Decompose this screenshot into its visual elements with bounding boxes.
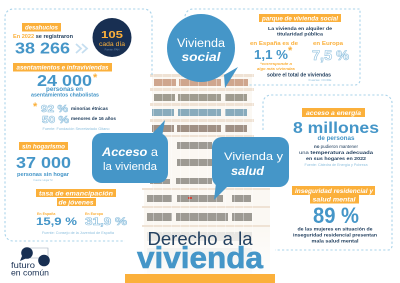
source: Fuente: Hogar SI [34, 178, 53, 182]
text: temperatura adecuada [299, 144, 373, 162]
speech bubble: Vivienda social: Vivienda [177, 38, 226, 50]
title: vivienda [137, 240, 264, 275]
stat: 92 % minorías étnicas [41, 103, 109, 115]
heading: inseguridad residencial y salud mental: inseguridad residencial y [295, 188, 374, 195]
speech bubble: Vivienda social: social [182, 50, 221, 64]
source: Fuente: OCDE [308, 78, 332, 82]
text: temperatura adecuada: en sus hogares en 2022 [306, 156, 366, 162]
number: 8 millones: 8 millones [293, 120, 379, 137]
orange footer bar [125, 274, 275, 283]
heading: tasa de emancipación de jóvenes [36, 189, 116, 207]
stat: España 15,9 %: En España [37, 212, 56, 216]
speech bubble: Acceso a la vivienda: Acceso a [101, 145, 158, 159]
panel: left statistics [5, 9, 152, 241]
source: Fuente: Fundación Secretariado Gitano [42, 127, 110, 131]
speech bubble: Acceso a la vivienda [92, 120, 168, 183]
logo: futuro en común [11, 247, 50, 278]
heading: tasa de emancipación de jóvenes: de jóvenes [58, 200, 94, 207]
chevrons [76, 44, 87, 53]
asterisk: * [93, 72, 98, 84]
title: Derecho a la [148, 229, 254, 249]
stat: 50 % menores de 16 años: 50 % [42, 114, 70, 126]
logo: futuro en común: en común [11, 268, 49, 278]
number: 24 000: 24 000 [37, 73, 92, 90]
badge: 105 cada día: 105 [101, 29, 123, 41]
note [257, 62, 295, 71]
label: en Europa: en Europa [313, 41, 344, 47]
text: temperatura adecuada: no pudieron mantener [314, 144, 358, 150]
text: mujeres [293, 226, 377, 244]
badge: 105 cada día [92, 18, 132, 57]
stat: Europa 31,9 %: En Europa [85, 212, 104, 216]
stat: 92 % minorías étnicas: 92 % [41, 103, 69, 115]
label: en España: en España es de [250, 41, 298, 47]
asterisk: * [288, 45, 293, 57]
heading: desahucios: desahucios [25, 25, 58, 32]
speech bubble: Vivienda y salud: salud [231, 164, 265, 178]
heading: inseguridad residencial y salud mental [292, 186, 375, 204]
number: 7,5 %: 7,5 % [312, 47, 350, 63]
heading: acceso a energía [302, 108, 365, 117]
heading: inseguridad residencial y salud mental: salud mental [312, 197, 356, 204]
heading: acceso a energía: acceso a energía [306, 110, 362, 117]
heading: tasa de emancipación de jóvenes: tasa de emancipación [39, 191, 113, 198]
heading: sin hogarismo: sin hogarismo [22, 143, 65, 150]
stat: España 15,9 %: 15,9 % [36, 216, 77, 228]
logo: futuro en común: futuro [11, 261, 36, 270]
source: Fuente: Cátedra de Energía y Pobreza [304, 163, 368, 167]
badge: 105 cada día: cada día [99, 41, 125, 48]
stat: Europa 31,9 %: 31,9 % [85, 216, 127, 228]
speech bubble: Acceso a la vivienda: la vivienda [103, 161, 158, 173]
heading [259, 14, 341, 22]
badge: 105 cada día: Fuente: PAH [105, 48, 119, 52]
speech bubble: Vivienda y salud [212, 137, 289, 200]
note: *corresponde a [260, 62, 292, 66]
number: 1,1 %: 1,1 % [254, 47, 288, 62]
heading: parque de vivienda social [261, 16, 338, 22]
number: 89 %: 89 % [313, 203, 359, 228]
text: personas en asentamientos chabolistas [31, 86, 99, 98]
panel: parque de vivienda social [185, 9, 360, 85]
text: alquiler público: titularidad pública [277, 32, 323, 38]
text: mujeres: mala salud mental [312, 238, 358, 244]
text: personas en asentamientos chabolistas: personas en [46, 86, 83, 93]
number: 37 000: 37 000 [16, 155, 71, 172]
note: algo más viviendas [257, 67, 295, 71]
panel: energía y salud mental [263, 95, 392, 250]
text: personas sin hogar: personas sin hogar [17, 172, 69, 178]
text: total de viviendas: sobre el total de viviendas [267, 72, 331, 78]
text: mujeres: inseguridad residencial presentan [293, 232, 377, 238]
source: Fuente: Consejo de la Juventud de España [42, 231, 114, 235]
speech bubble: Vivienda social [167, 14, 238, 88]
text: mujeres: de las mujeres en situación de [298, 226, 373, 232]
asterisk: * [33, 101, 38, 113]
text: personas en asentamientos chabolistas: asentamientos chabolistas [31, 92, 99, 98]
stat: Europa 31,9 % [85, 212, 127, 228]
stat: España 15,9 % [36, 212, 77, 228]
text: alquiler público: La vivienda en alquiler de [268, 26, 332, 32]
building photo [140, 74, 272, 283]
text: alquiler público [268, 26, 332, 38]
text: de personas: de personas [318, 136, 355, 142]
stat: 50 % menores de 16 años: menores de 16 años [71, 116, 117, 121]
number: 38 266: 38 266 [15, 40, 70, 58]
text: temperatura adecuada: una temperatura adecuada [299, 150, 373, 156]
stat: 92 % minorías étnicas: minorías étnicas [71, 106, 109, 111]
heading: asentamientos e infraviviendas: asentamientos e infraviviendas [16, 65, 109, 72]
speech bubble: Vivienda y salud: Vivienda y [224, 151, 284, 163]
text: en 2022 se registraron: En 2022 se registraron [13, 34, 74, 40]
stat: 50 % menores de 16 años [42, 114, 117, 126]
